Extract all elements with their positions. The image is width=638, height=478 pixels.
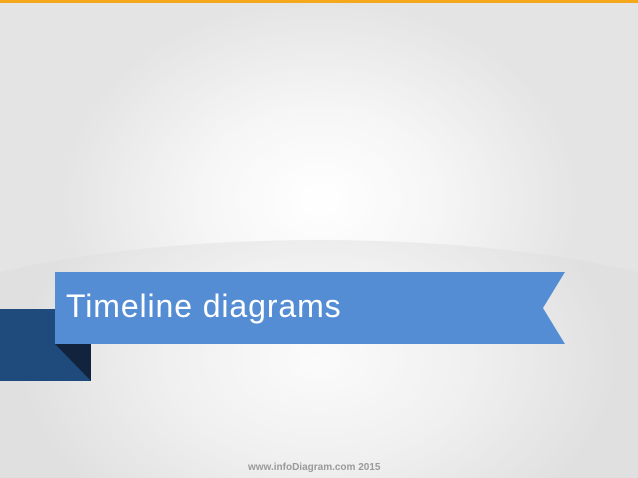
footer credit: www.infoDiagram.com 2015 (248, 462, 380, 473)
ribbon front (55, 272, 565, 344)
ribbon back fold (0, 309, 91, 381)
background lower area (0, 240, 638, 478)
title: Timeline diagrams (66, 288, 342, 324)
top accent bar (0, 0, 638, 3)
